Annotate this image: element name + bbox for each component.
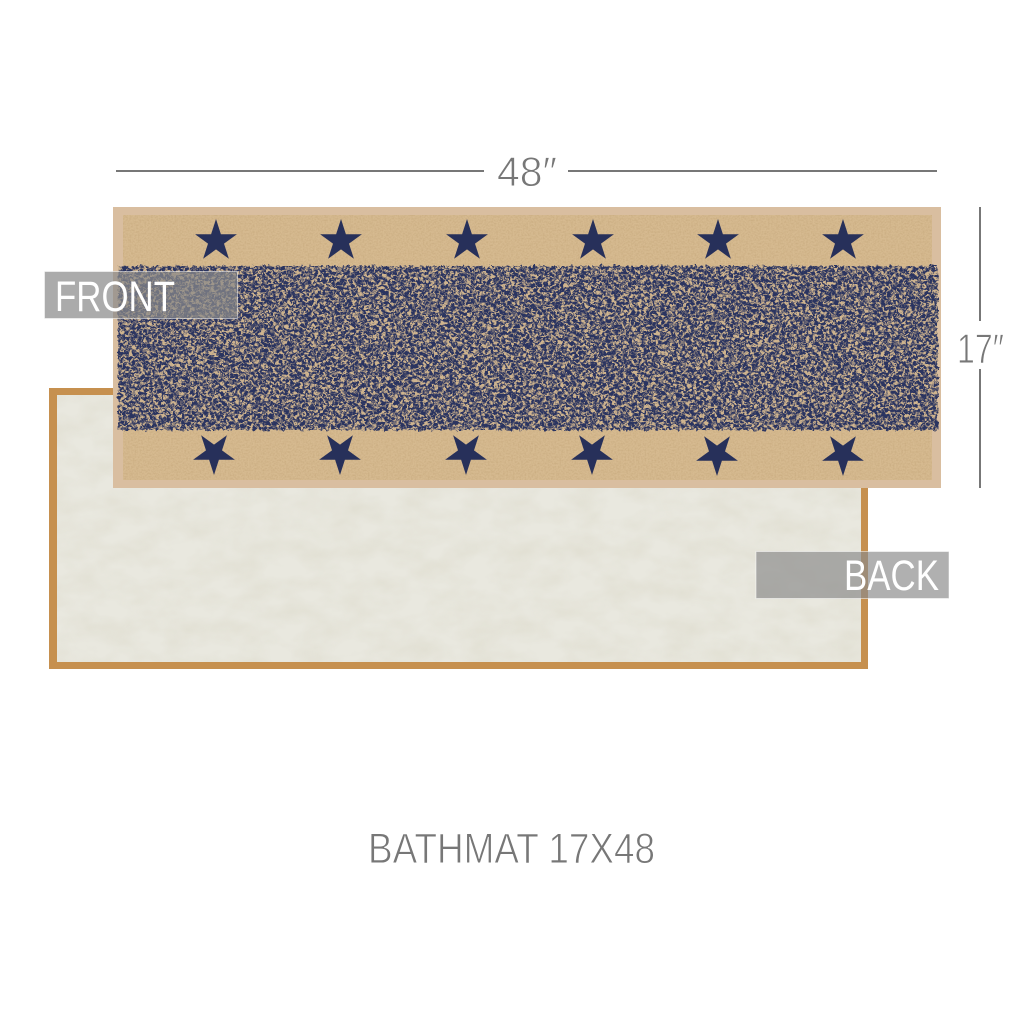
- jute base with binding: [113, 207, 941, 488]
- caption: BATHMAT 17X48: [368, 825, 655, 873]
- height dimension: 17 inches: 17″: [957, 325, 1004, 372]
- bottom row of stars: [193, 435, 864, 476]
- label: front: FRONT: [55, 273, 175, 321]
- label: back: BACK: [844, 552, 939, 600]
- top row of stars: [195, 219, 864, 259]
- front of mat: [113, 207, 941, 488]
- width dimension: 48 inches: 48″: [497, 148, 557, 195]
- back of mat: [49, 388, 868, 669]
- label: back: [756, 552, 949, 600]
- navy and tan shag pile: [118, 266, 938, 430]
